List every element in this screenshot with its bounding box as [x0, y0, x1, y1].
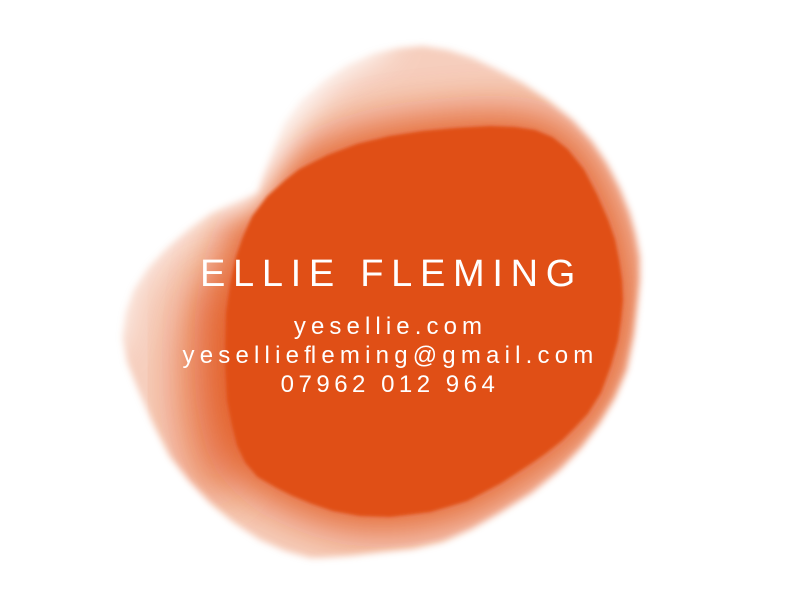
email: yesellieﬂeming@gmail.com [183, 342, 598, 369]
extra wash on the lower left [173, 270, 257, 500]
stronger wash near the core [226, 127, 622, 516]
core: solid orange shape [226, 127, 622, 516]
graphic: orange watercolour blob [120, 42, 644, 562]
phone: 07962 012 964 [281, 371, 499, 398]
contact details [182, 313, 598, 398]
title: ELLIE FLEMING [200, 253, 583, 295]
pale outer wash [120, 42, 643, 562]
soft halo around the core [120, 42, 644, 562]
website: yesellie.com [294, 313, 487, 340]
